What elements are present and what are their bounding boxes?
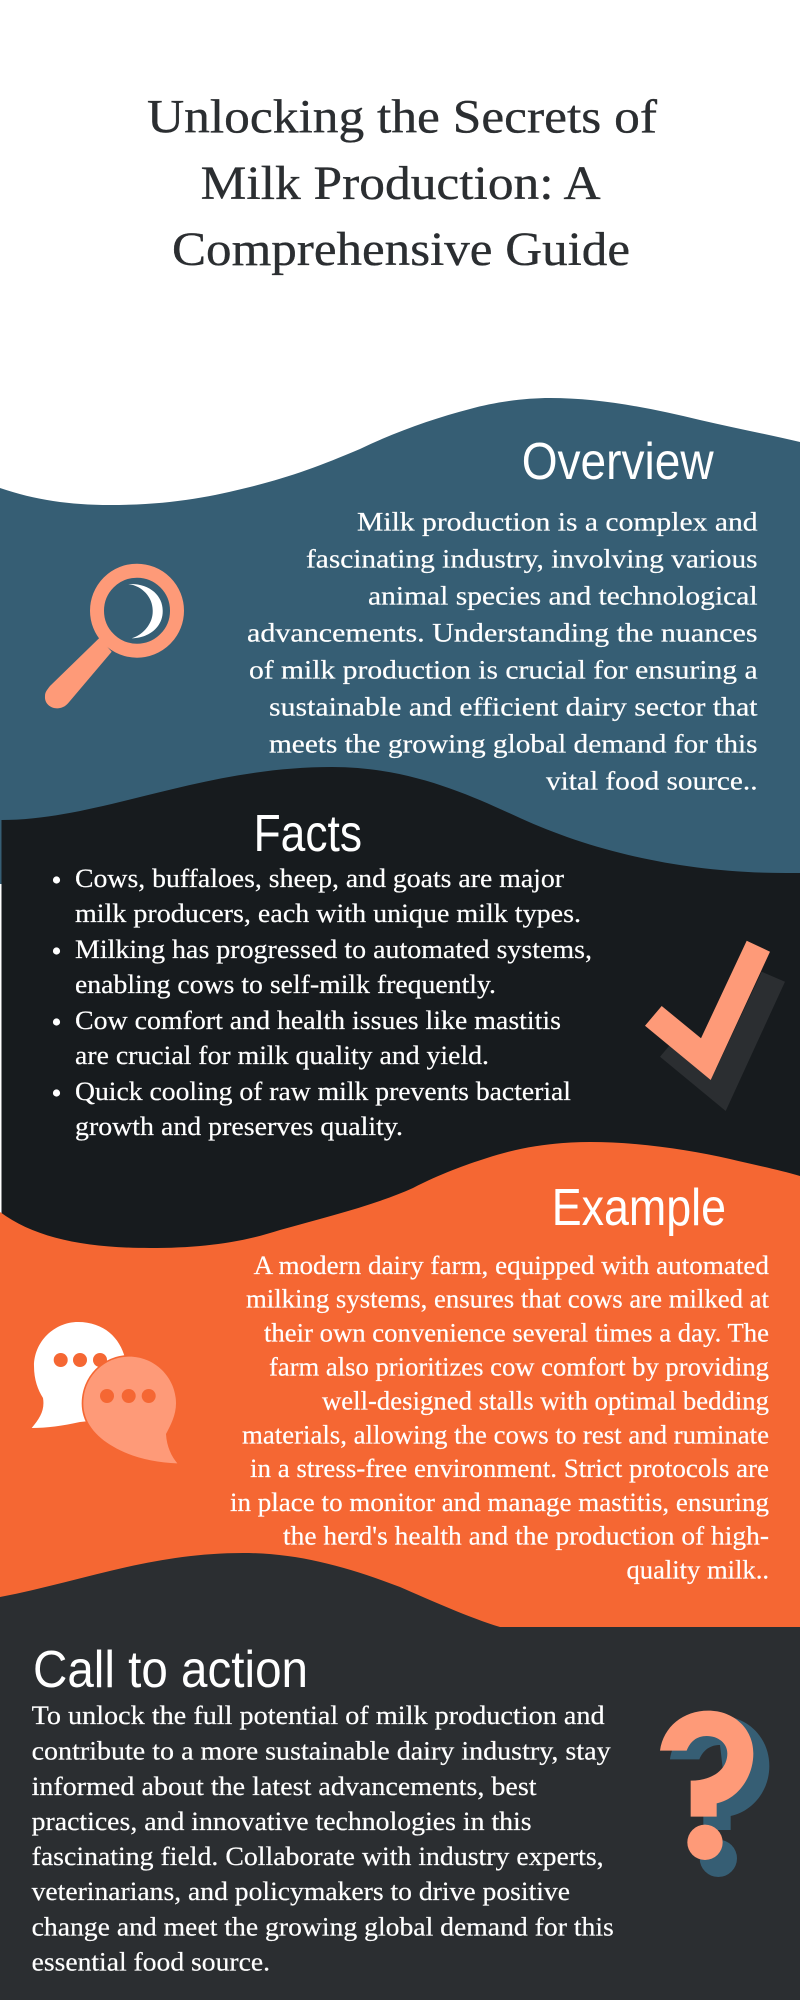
title <box>147 91 657 276</box>
text block: overview body: animal species and technological <box>368 582 758 611</box>
text block: example body: materials, allowing the cows to rest and ruminate <box>242 1420 769 1449</box>
text block: overview body: Milk production is a complex and <box>357 508 758 537</box>
title: Unlocking the Secrets of <box>147 91 657 144</box>
list: facts bullets: Quick cooling of raw milk prevents bacterial <box>75 1077 571 1106</box>
text block: example body: A modern dairy farm, equipped with automated <box>254 1251 769 1280</box>
text block: example body <box>230 1251 770 1585</box>
text block: overview body <box>247 508 758 796</box>
text block: call to action body: informed about the latest advancements, best <box>32 1772 537 1801</box>
panel: call to action wave background <box>0 1553 800 2000</box>
text block: overview body: vital food source.. <box>546 767 758 796</box>
text block: overview body: fascinating industry, involving various <box>306 545 758 574</box>
heading: Facts: Facts <box>254 805 362 863</box>
heading: Example: Example <box>552 1179 726 1237</box>
heading: Overview: Overview <box>522 433 714 491</box>
list: facts bullets: Cow comfort and health issues like mastitis <box>75 1006 561 1035</box>
icon: question mark <box>660 1711 769 1877</box>
text block: call to action body: practices, and innovative technologies in this <box>32 1807 532 1836</box>
list: facts bullets <box>53 864 592 1141</box>
icon: check mark <box>645 941 785 1111</box>
text block: call to action body: veterinarians, and policymakers to drive positive <box>32 1877 570 1906</box>
list: facts bullets: Cows, buffaloes, sheep, and goats are major <box>75 864 564 893</box>
text block: example body: their own convenience several times a day. The <box>264 1319 769 1348</box>
text block: example body: well-designed stalls with optimal bedding <box>322 1386 769 1415</box>
text block: example body: in a stress-free environment. Strict protocols are <box>250 1454 769 1483</box>
list: facts bullets: enabling cows to self-milk frequently. <box>75 970 496 999</box>
text block: overview body: sustainable and efficient dairy sector that <box>269 693 758 722</box>
text block: overview body: advancements. Understanding the nuances <box>247 619 758 648</box>
text block: example body: the herd's health and the production of high- <box>283 1522 769 1551</box>
panel: example wave background <box>0 1142 800 1650</box>
icon: speech bubbles <box>32 1322 177 1463</box>
list: facts bullets: milk producers, each with unique milk types. <box>75 899 581 928</box>
text block: example body: quality milk.. <box>626 1556 769 1585</box>
text block: overview body: of milk production is crucial for ensuring a <box>249 656 758 685</box>
panel: facts wave background <box>2 767 800 1300</box>
text block: call to action body: fascinating field. Collaborate with industry experts, <box>32 1842 604 1871</box>
list: facts bullets: are crucial for milk quality and yield. <box>75 1041 489 1070</box>
text block: call to action body: To unlock the full potential of milk production and <box>32 1701 605 1730</box>
title: Milk Production: A <box>201 157 601 210</box>
list: facts bullets: Milking has progressed to automated systems, <box>75 935 592 964</box>
text block: call to action body: contribute to a more sustainable dairy industry, stay <box>32 1736 611 1765</box>
heading: Call to action: Call to action <box>33 1641 308 1699</box>
text block: call to action body <box>32 1701 614 1977</box>
panel: overview wave background <box>0 398 800 900</box>
text block: example body: in place to monitor and manage mastitis, ensuring <box>230 1488 769 1517</box>
title: Comprehensive Guide <box>172 223 630 276</box>
text block: example body: milking systems, ensures that cows are milked at <box>246 1285 770 1314</box>
text block: call to action body: change and meet the growing global demand for this <box>32 1913 614 1942</box>
text block: overview body: meets the growing global demand for this <box>269 730 758 759</box>
text block: example body: farm also prioritizes cow comfort by providing <box>269 1353 769 1382</box>
list: facts bullets: growth and preserves quality. <box>75 1112 403 1141</box>
icon: magnifying glass <box>45 571 177 708</box>
text block: call to action body: essential food source. <box>32 1948 270 1977</box>
